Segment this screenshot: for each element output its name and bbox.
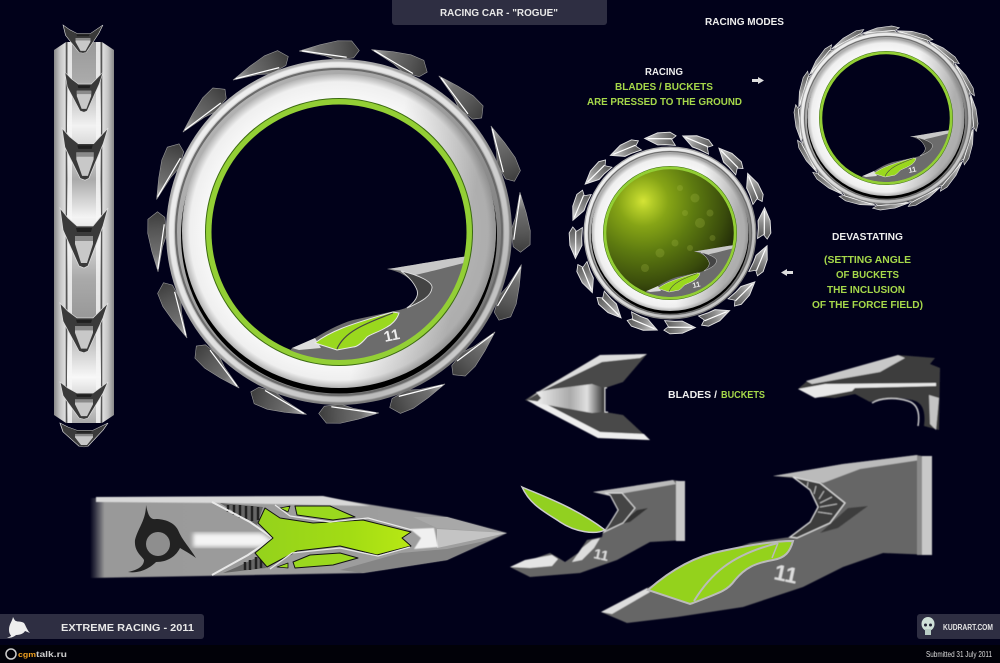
car side view: closed canopy (601, 455, 932, 623)
label: blades and buckets (668, 390, 765, 401)
number: 11 (772, 559, 800, 589)
source logo: talk.ru (36, 650, 67, 659)
wheel blades (566, 129, 774, 337)
force field (606, 169, 740, 300)
wheel rim (166, 59, 512, 405)
footer title: EXTREME RACING - 2011 (61, 623, 194, 634)
title bar: RACING CAR - "ROGUE" (440, 8, 558, 19)
car number: 11 (692, 280, 701, 290)
source logo (6, 649, 67, 659)
logo emblem (128, 505, 196, 572)
text block: racing mode (587, 67, 742, 108)
tire front view (54, 25, 114, 447)
text block: racing mode: BLADES / BUCKETS (615, 82, 713, 93)
car number: 11 (382, 326, 401, 346)
text block: devastating mode: OF THE FORCE FIELD) (812, 300, 923, 311)
arrow: right (752, 77, 764, 84)
wheel blades (793, 25, 979, 211)
large wheel (146, 39, 532, 425)
wheel interior with car (822, 54, 956, 186)
footer left panel (0, 614, 204, 639)
wheel rim (584, 146, 756, 320)
text block: devastating mode: OF BUCKETS (836, 270, 899, 281)
text block: devastating mode (812, 232, 923, 311)
label: blades and buckets: BLADES / (668, 390, 717, 401)
text block: devastating mode: (SETTING ANGLE (824, 255, 911, 266)
car side view: open canopy (510, 480, 685, 577)
text block: devastating mode: DEVASTATING (832, 232, 903, 243)
source logo: cgm (18, 652, 36, 659)
field speckles (641, 185, 716, 272)
arrow: left (781, 269, 793, 276)
open canopy wing (522, 487, 605, 532)
racing mode wheel (793, 25, 979, 211)
icon: skull (922, 617, 934, 635)
cockpit vents (212, 502, 273, 575)
title bar (392, 0, 607, 25)
wheel blades (146, 39, 532, 425)
emblem (7, 617, 30, 638)
car number: 11 (908, 165, 917, 175)
text block: racing mode: RACING (645, 67, 683, 78)
footer right panel (917, 614, 1000, 639)
wheel interior with car (212, 104, 479, 367)
label: blades and buckets: BUCKETS (721, 390, 765, 401)
devastating mode wheel (566, 129, 774, 337)
car top view (90, 496, 507, 578)
closed canopy green panels (648, 541, 793, 604)
blade side view (798, 355, 940, 430)
text block: devastating mode: THE INCLUSION (827, 285, 905, 296)
car side view: open canopy: 11 (592, 545, 610, 564)
text block: racing mode: ARE PRESSED TO THE GROUND (587, 97, 742, 108)
body highlights (96, 496, 507, 573)
blade front view (525, 354, 650, 440)
canopy frame and green panels (255, 505, 412, 569)
wheel rim (800, 32, 972, 204)
heading: racing modes: RACING MODES (705, 17, 784, 28)
